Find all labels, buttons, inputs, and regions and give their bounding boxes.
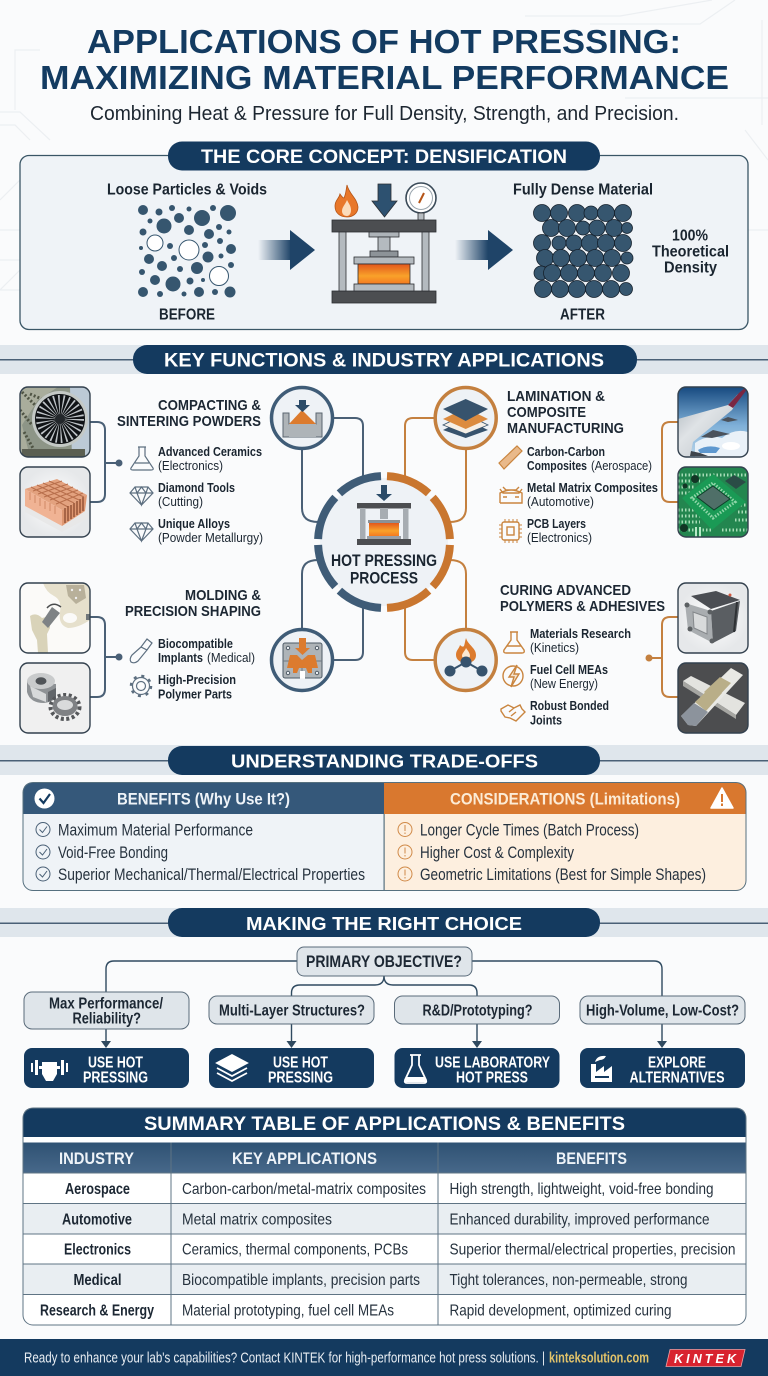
decision: multi-layer [209, 996, 374, 1024]
photo: metal parts [20, 663, 90, 733]
list: considerations: Geometric Limitations (Best for Simple Shapes) [420, 866, 706, 884]
table title [23, 1108, 746, 1137]
photo frame: metal parts [20, 663, 90, 733]
footer text: Ready to enhance your lab's capabilities? Contact KINTEK for high-performance hot press solutions. | [24, 1350, 545, 1366]
photo: aircraft wing [678, 387, 748, 457]
icon: layers [217, 1055, 247, 1081]
row: research and energy: Research & Energy [40, 1302, 154, 1320]
photo: jet turbine [20, 387, 90, 457]
panel: molding and precision shaping [125, 587, 261, 702]
panel: curing polymers [500, 582, 665, 728]
decision tree connectors [106, 961, 662, 1042]
result: use hot pressing: PRESSING [83, 1070, 148, 1086]
footer [0, 1339, 768, 1376]
text: pcb layers [527, 516, 592, 545]
text: pcb layers: (Electronics) [527, 530, 592, 545]
result: use hot pressing layers [209, 1048, 374, 1088]
table header: INDUSTRY [59, 1150, 134, 1168]
text: fuel cell [530, 662, 608, 691]
title [40, 23, 729, 96]
list: benefits: Superior Mechanical/Thermal/Electrical Properties [58, 866, 365, 884]
heading: compacting: SINTERING POWDERS [117, 413, 261, 430]
text: biocompatible implants: Implants [158, 650, 203, 665]
hub label [331, 552, 437, 588]
photo frame: heat sink [20, 467, 90, 537]
text: polymer parts [158, 672, 236, 702]
icon: factory [591, 1056, 612, 1082]
heading: molding [125, 587, 261, 620]
list: considerations [398, 822, 706, 884]
section banner: trade-offs [0, 745, 768, 775]
icon: lab flask [405, 1055, 426, 1083]
row: research and energy [40, 1302, 672, 1320]
icon: diamond [130, 523, 153, 541]
row: research and energy: Rapid development, optimized curing [450, 1302, 672, 1320]
icon: handshake [501, 705, 525, 721]
heading: core concept [168, 142, 600, 170]
icon: curing node [435, 630, 496, 690]
text: bonded joints: Robust Bonded [530, 698, 609, 713]
heading: lamination: COMPOSITE [507, 404, 586, 421]
text: polymer parts: High-Precision [158, 672, 236, 687]
photo: bonded joint [678, 663, 748, 733]
decision: primary objective: PRIMARY OBJECTIVE? [306, 952, 462, 971]
benefits header: BENEFITS (Why Use It?) [117, 790, 290, 808]
title: APPLICATIONS OF HOT PRESSING: [87, 23, 681, 60]
text: diamond tools: (Cutting) [158, 494, 203, 509]
text: unique alloys [158, 516, 263, 545]
heading: molding: PRECISION SHAPING [125, 603, 261, 620]
list: benefits: Maximum Material Performance [58, 822, 253, 840]
hub label: HOT PRESSING [331, 552, 437, 570]
row: automotive [62, 1212, 710, 1228]
text: materials research [530, 626, 631, 655]
before label: Loose Particles & Voids [107, 182, 267, 198]
list: considerations: Longer Cycle Times (Batch Process) [420, 822, 639, 840]
subtitle: Combining Heat & Pressure for Full Density, Strength, and Precision. [90, 103, 679, 125]
heading: lamination [507, 388, 624, 437]
logo: kintek [666, 1350, 745, 1366]
decision: max performance: Max Performance/ [49, 996, 163, 1012]
hub ring [318, 476, 450, 608]
heading: curing [500, 582, 665, 615]
row: electronics: Ceramics, thermal components, PCBs [182, 1242, 408, 1258]
row: aerospace: Aerospace [65, 1181, 130, 1198]
text: metal matrix: (Automotive) [527, 494, 594, 509]
decision: prototyping [394, 996, 560, 1024]
heading: lamination: MANUFACTURING [507, 420, 624, 437]
heading: curing: CURING ADVANCED [500, 582, 631, 599]
icon: layers node [435, 388, 496, 448]
density callout: Theoretical [652, 244, 729, 260]
row: aerospace [65, 1181, 714, 1198]
heading: core concept: THE CORE CONCEPT: DENSIFICATION [201, 146, 567, 168]
result: use hot pressing: USE HOT [88, 1054, 143, 1072]
benefits header [23, 782, 384, 814]
text: metal matrix: Metal Matrix Composites [527, 480, 658, 495]
considerations header: CONSIDERATIONS (Limitations) [450, 790, 680, 808]
text: polymer parts: Polymer Parts [158, 686, 232, 702]
table header [23, 1142, 746, 1173]
title: MAXIMIZING MATERIAL PERFORMANCE [40, 59, 729, 96]
result: laboratory hot press [394, 1048, 560, 1088]
icon: strength [31, 1060, 68, 1081]
heading: curing: POLYMERS & ADHESIVES [500, 598, 665, 615]
photo frame: joint [678, 663, 748, 733]
panel: summary table [23, 1108, 746, 1325]
photo frame: fuel cell [678, 583, 748, 653]
panel: compacting and sintering [117, 397, 263, 545]
photo: fuel cell stack [678, 583, 748, 653]
text: metal matrix [527, 480, 658, 509]
icon: car [500, 487, 522, 503]
row: medical [74, 1272, 688, 1289]
text: biocompatible implants: Biocompatible [158, 636, 233, 651]
list: considerations: Higher Cost & Complexity [420, 844, 575, 862]
icon: hot press machine [332, 183, 436, 303]
text: biocompatible implants [158, 636, 255, 665]
arrow: to press [258, 230, 315, 270]
text: advanced ceramics [158, 444, 262, 473]
result: use hot pressing layers: PRESSING [268, 1070, 333, 1086]
decision: primary objective [297, 947, 472, 976]
arrow: to result [455, 230, 513, 270]
section banner: right choice: MAKING THE RIGHT CHOICE [246, 913, 522, 934]
icon: gear [131, 676, 151, 696]
decision: high volume [580, 996, 745, 1024]
photo: copper heat sink [20, 467, 90, 537]
decision: multi-layer: Multi-Layer Structures? [219, 1002, 365, 1020]
photo: circuit board [678, 467, 748, 537]
icon: hub press [357, 485, 411, 545]
loose particles diagram [138, 205, 236, 298]
text: diamond tools: Diamond Tools [158, 480, 235, 495]
table title: SUMMARY TABLE OF APPLICATIONS & BENEFITS [144, 1114, 625, 1135]
photo frame: wing [678, 387, 748, 457]
result: use hot pressing layers: USE HOT [273, 1054, 328, 1072]
table header: KEY APPLICATIONS [232, 1150, 377, 1168]
text: biocompatible implants: (Medical) [207, 650, 255, 665]
icon: chip [499, 519, 522, 543]
heading: compacting [117, 397, 261, 430]
density callout: 100% [672, 228, 708, 244]
density callout [652, 228, 729, 276]
central hub: hot pressing process [318, 476, 450, 608]
list: benefits [36, 822, 365, 884]
result: laboratory hot press: USE LABORATORY [435, 1054, 551, 1072]
text: carbon composites: Composites [527, 458, 587, 473]
density callout: Density [664, 260, 717, 276]
after label: Fully Dense Material [513, 182, 653, 198]
row: automotive: Automotive [62, 1212, 132, 1228]
text: fuel cell: Fuel Cell MEAs [530, 662, 608, 677]
row: electronics: Electronics [64, 1242, 131, 1258]
text: bonded joints [530, 698, 609, 728]
icon: carbon strip [499, 446, 522, 469]
photo: hip implant [30, 584, 90, 652]
table rows backgrounds [23, 1204, 746, 1294]
row: medical: Medical [74, 1272, 122, 1289]
decision: max performance: Reliability? [72, 1010, 141, 1028]
panel: trade-offs [23, 782, 746, 890]
connectors: hub lines right [405, 418, 678, 697]
photo frame: implant [20, 583, 90, 653]
row: automotive: Enhanced durability, improved performance [450, 1212, 710, 1228]
result: use hot pressing [24, 1048, 189, 1088]
text: carbon composites: Carbon-Carbon [527, 444, 605, 459]
text: unique alloys: Unique Alloys [158, 516, 230, 531]
icon: mold node [272, 630, 332, 690]
before caption: BEFORE [159, 306, 215, 324]
row: medical: Tight tolerances, non-permeable, strong [450, 1272, 688, 1289]
row: medical: Biocompatible implants, precision parts [182, 1272, 420, 1289]
considerations header [384, 782, 746, 814]
section banner: key functions [0, 345, 768, 374]
section banner: trade-offs: UNDERSTANDING TRADE-OFFS [231, 750, 538, 772]
result: laboratory hot press: HOT PRESS [456, 1070, 528, 1086]
panel: core concept [20, 142, 748, 330]
connectors: hub lines left [90, 418, 363, 697]
row: automotive: Metal matrix composites [182, 1212, 332, 1228]
after caption: AFTER [560, 306, 605, 324]
text: advanced ceramics: Advanced Ceramics [158, 444, 262, 459]
row: research and energy: Material prototyping, fuel cell MEAs [182, 1302, 394, 1320]
heading: lamination: LAMINATION & [507, 388, 605, 405]
text: carbon composites: (Aerospace) [591, 458, 652, 473]
icon: flask [131, 447, 153, 470]
hub label: PROCESS [350, 570, 418, 588]
decision: prototyping: R&D/Prototyping? [422, 1002, 532, 1020]
section banner: key functions: KEY FUNCTIONS & INDUSTRY APPLICATIONS [164, 350, 604, 372]
text: bonded joints: Joints [530, 712, 562, 728]
table header: BENEFITS [556, 1150, 627, 1168]
text: fuel cell: (New Energy) [530, 676, 598, 691]
icon: energy bolt [503, 665, 523, 687]
text: pcb layers: PCB Layers [527, 516, 586, 531]
text: advanced ceramics: (Electronics) [158, 458, 223, 473]
list: benefits: Void-Free Bonding [58, 844, 168, 862]
panel: lamination and composite [499, 388, 658, 545]
text: materials research: Materials Research [530, 626, 631, 641]
section banner: right choice [0, 908, 768, 937]
decision: max performance [24, 992, 189, 1029]
footer text: kinteksolution.com [549, 1350, 649, 1366]
photo frame: turbine [20, 387, 90, 457]
text: materials research: (Kinetics) [530, 640, 579, 655]
row: electronics [64, 1242, 736, 1258]
logo: kintek: KINTEK [674, 1352, 737, 1366]
icon: diamond [130, 487, 153, 505]
text: carbon composites [527, 444, 652, 473]
decision arrowheads [101, 1041, 667, 1048]
heading: molding: MOLDING & [185, 587, 261, 604]
icon: implant [130, 639, 152, 663]
text: unique alloys: (Powder Metallurgy) [158, 530, 263, 545]
photo frame: board [678, 467, 748, 537]
result: explore alternatives: ALTERNATIVES [630, 1070, 724, 1086]
icon: flask [504, 632, 524, 653]
dense material diagram [534, 204, 633, 298]
heading: compacting: COMPACTING & [158, 397, 261, 414]
text: diamond tools [158, 480, 235, 509]
icon: compacting node [272, 388, 332, 448]
result: explore alternatives: EXPLORE [648, 1054, 706, 1072]
row: aerospace: High strength, lightweight, void-free bonding [450, 1181, 714, 1198]
result: explore alternatives [580, 1048, 745, 1088]
row: aerospace: Carbon-carbon/metal-matrix composites [182, 1181, 426, 1198]
